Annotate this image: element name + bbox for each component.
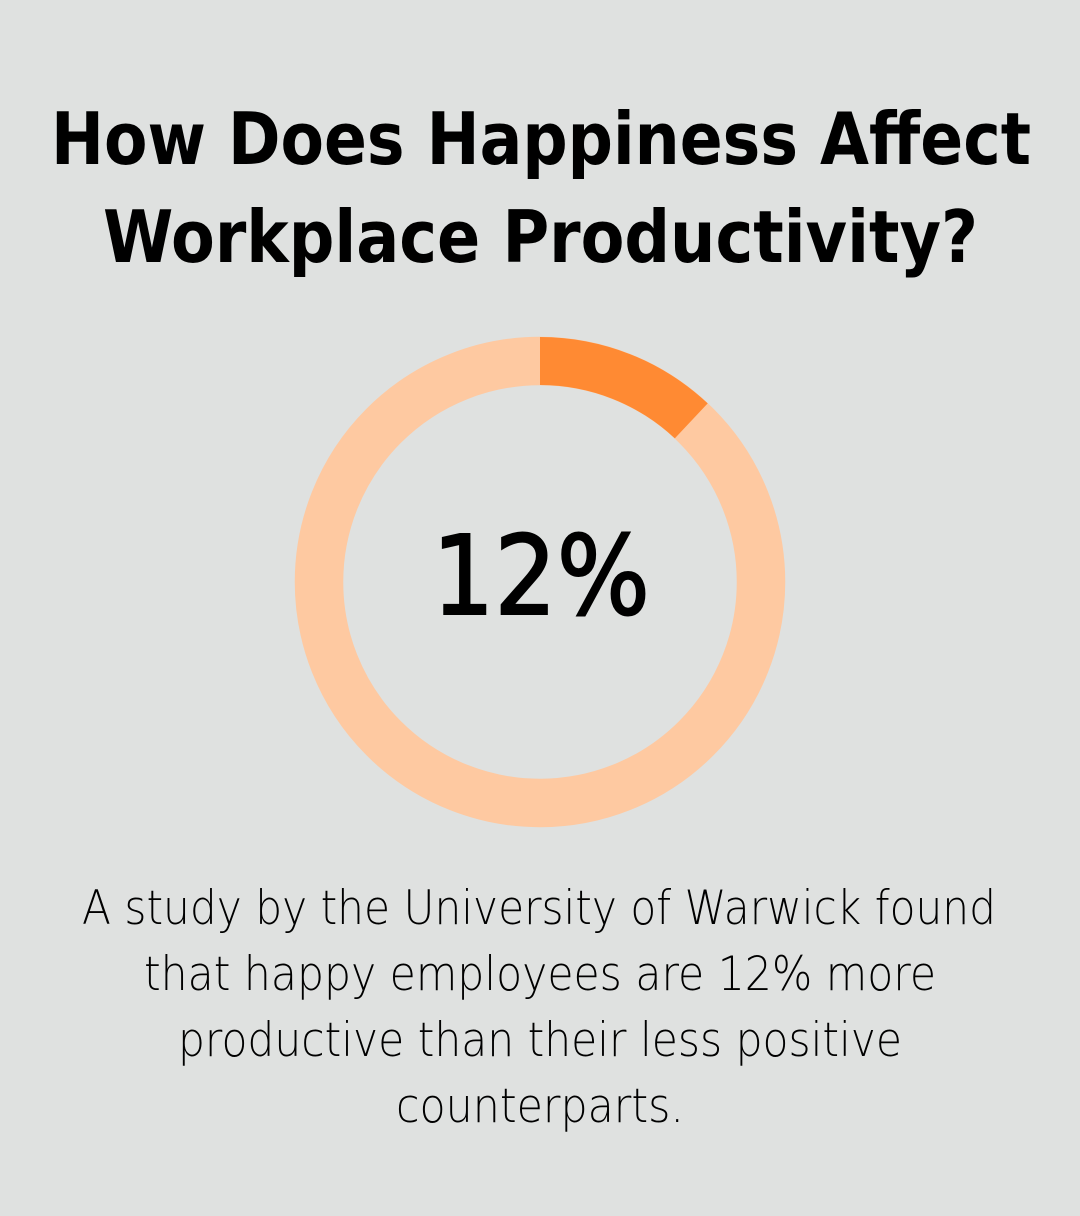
description text: counterparts. bbox=[396, 1079, 684, 1134]
title: Workplace Productivity? bbox=[103, 195, 978, 279]
description text: productive than their less positive bbox=[178, 1013, 902, 1068]
description text: that happy employees are 12% more bbox=[144, 947, 936, 1002]
description text bbox=[82, 881, 996, 1134]
donut chart: 12% bbox=[319, 337, 761, 803]
title bbox=[51, 97, 1031, 279]
donut value: 12% bbox=[432, 512, 650, 640]
description text: A study by the University of Warwick found bbox=[82, 881, 996, 936]
